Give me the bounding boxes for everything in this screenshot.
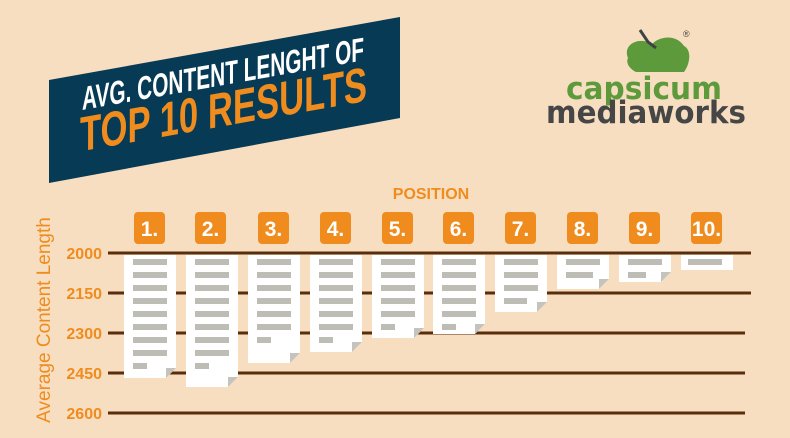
doc 2 [186, 255, 238, 387]
position badges [134, 212, 722, 244]
grid lines [108, 253, 751, 413]
title banner: AVG. CONTENT LENGHT OF [82, 31, 364, 118]
doc 4 [310, 255, 362, 352]
position badges: 1. [141, 218, 158, 241]
position badges: 7. [512, 218, 529, 241]
position badges: 5. [389, 218, 406, 241]
y axis labels [66, 246, 102, 423]
position badges: 10. [692, 218, 721, 241]
documents [124, 255, 733, 387]
y axis labels: 2450 [66, 366, 102, 383]
doc 10 [681, 255, 733, 270]
doc 1 [124, 255, 176, 378]
doc 9 [619, 255, 671, 282]
logo [546, 29, 746, 131]
position label: POSITION [393, 186, 469, 203]
y axis labels: 2600 [66, 406, 102, 423]
doc 5 [372, 255, 424, 338]
position badges: 4. [327, 218, 344, 241]
position badges: 8. [574, 218, 591, 241]
y axis labels: 2000 [66, 246, 102, 263]
title banner: TOP 10 RESULTS [80, 57, 367, 162]
title banner [49, 17, 400, 183]
doc 6 [433, 255, 485, 334]
logo: capsicum [566, 71, 722, 107]
doc 3 [248, 255, 300, 363]
position badges: 2. [202, 218, 219, 241]
position badges: 9. [636, 218, 653, 241]
y axis labels: 2300 [66, 326, 102, 343]
logo: ® [683, 29, 690, 39]
logo: mediaworks [546, 95, 746, 131]
position badges: 6. [450, 218, 467, 241]
y axis labels: 2150 [66, 286, 102, 303]
doc 8 [557, 255, 609, 289]
doc 7 [495, 255, 547, 312]
y axis title: Average Content Length [34, 217, 55, 423]
position badges: 3. [265, 218, 282, 241]
